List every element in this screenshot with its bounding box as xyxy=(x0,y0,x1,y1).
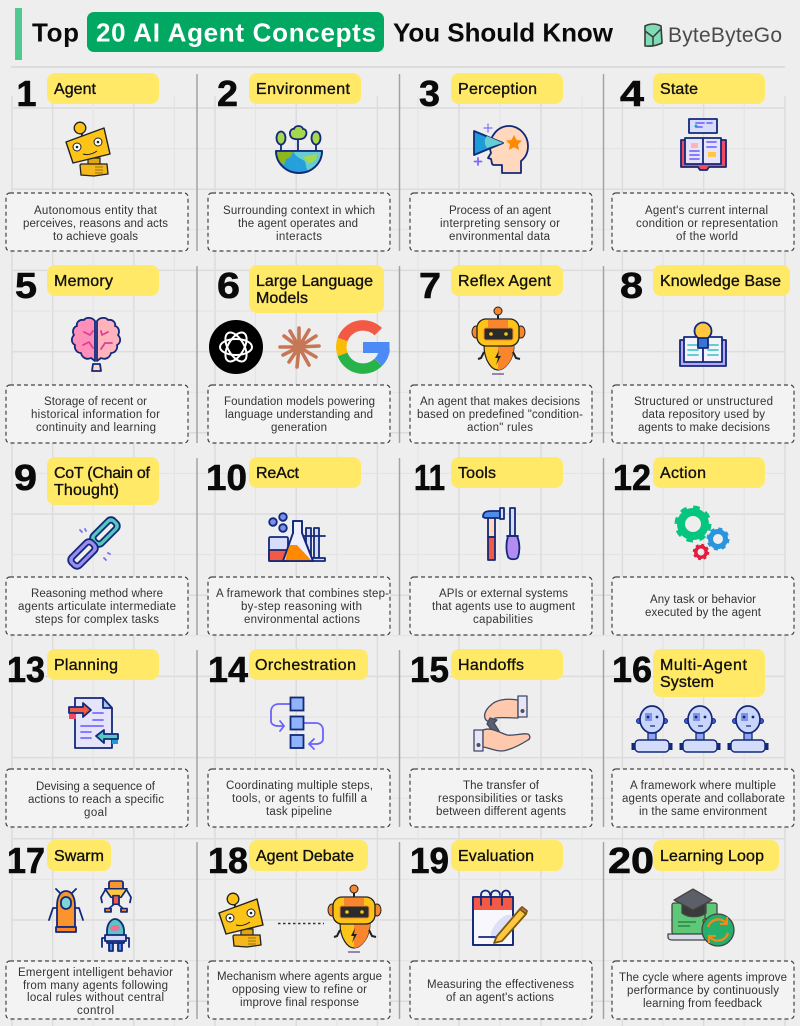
number 18: 18 xyxy=(208,840,248,881)
description: the agent operates and xyxy=(238,218,358,230)
heading: Learning Loop xyxy=(653,840,779,871)
description: action" rules xyxy=(467,422,533,434)
description xyxy=(612,193,794,251)
panel: 9 CoT (Chain of Thought) xyxy=(6,457,188,635)
panel: 18 Agent Debate xyxy=(208,840,390,1019)
description xyxy=(612,577,794,635)
heading: Swarm: Swarm xyxy=(54,848,104,865)
icon: open book with speech bubble xyxy=(681,119,726,170)
description: improve final response xyxy=(240,997,359,1009)
description: control xyxy=(77,1005,114,1017)
number 20: 20 xyxy=(608,840,654,881)
icon: head with vision cone xyxy=(474,124,528,173)
heading: Orchestration: Orchestration xyxy=(255,657,356,674)
heading: Orchestration xyxy=(249,649,368,680)
description: actions to reach a specific xyxy=(28,794,164,806)
icon: earth with trees xyxy=(276,126,322,173)
heading: State: State xyxy=(660,81,698,98)
title: 20 AI Agent Concepts xyxy=(96,18,376,48)
panel: 8 Knowledge Base xyxy=(612,265,794,443)
heading: Learning Loop: Learning Loop xyxy=(660,848,764,865)
description: opposing view to refine or xyxy=(232,984,367,996)
panel: 1 Agent xyxy=(6,73,188,251)
description xyxy=(612,385,794,443)
panel: 4 State xyxy=(612,73,794,251)
number 11: 11 xyxy=(414,457,445,498)
heading: Multi-Agent System xyxy=(653,649,765,697)
description xyxy=(208,193,390,251)
description xyxy=(208,769,390,827)
description: perceives, reasons and acts xyxy=(23,218,168,230)
icon: brain xyxy=(72,318,120,371)
description: agents operate and collaborate xyxy=(622,793,785,805)
description: that agents use to augment xyxy=(432,601,576,613)
description: Any task or behavior xyxy=(650,594,756,606)
number 8: 8 xyxy=(620,265,643,306)
description: environmental actions xyxy=(244,614,360,626)
panel: 12 Action xyxy=(612,457,794,635)
icon: hammer and screwdriver xyxy=(483,508,519,560)
panel: 20 Learning Loop xyxy=(608,840,794,1019)
number 7: 7 xyxy=(419,265,441,306)
panel: 16 Multi-Agent System xyxy=(612,649,794,827)
description: An agent that makes decisions xyxy=(420,396,580,408)
number 19: 19 xyxy=(410,840,449,881)
heading: Evaluation xyxy=(451,840,563,871)
description: language understanding and xyxy=(225,409,373,421)
description: tools, or agents to fulfill a xyxy=(232,793,368,805)
number 9: 9 xyxy=(14,457,37,498)
description xyxy=(410,385,592,443)
number 14: 14 xyxy=(208,649,248,690)
description: Agent's current internal xyxy=(645,205,768,217)
heading: Knowledge Base xyxy=(653,265,790,296)
description: Reasoning method where xyxy=(31,588,163,600)
heading: Perception xyxy=(451,73,563,104)
heading: Planning: Planning xyxy=(54,657,118,674)
panel: 19 Evaluation xyxy=(410,840,592,1019)
description: agents to make decisions xyxy=(638,422,770,434)
panel: 15 Handoffs xyxy=(410,649,592,827)
description xyxy=(6,961,188,1019)
description: agents articulate intermediate xyxy=(18,601,176,613)
heading: CoT (Chain of Thought): CoT (Chain of xyxy=(54,465,151,482)
description: continuity and learning xyxy=(36,422,156,434)
header accent bar xyxy=(15,8,22,60)
description: historical information for xyxy=(31,409,160,421)
description: Devising a sequence of xyxy=(36,781,156,793)
description: APIs or external systems xyxy=(439,588,568,600)
icon: laptop, graduation cap, refresh xyxy=(668,889,734,946)
description: Structured or unstructured xyxy=(634,396,773,408)
heading: Multi-Agent System: Multi-Agent xyxy=(660,657,748,674)
number 6: 6 xyxy=(217,265,240,306)
heading: Swarm xyxy=(47,840,111,871)
panel: 10 ReAct xyxy=(206,457,390,635)
description: Process of an agent xyxy=(449,205,552,217)
icon: reflex robot xyxy=(472,307,525,374)
logo: ByteByteGo: ByteByteGo xyxy=(668,24,782,47)
description: Mechanism where agents argue xyxy=(217,971,382,983)
number 4: 4 xyxy=(620,73,644,114)
description: Foundation models powering xyxy=(224,396,375,408)
panel: 17 Swarm xyxy=(6,840,188,1019)
description: steps for complex tasks xyxy=(35,614,159,626)
heading: Agent xyxy=(47,73,159,104)
panel: 13 Planning xyxy=(6,649,188,827)
description: data repository used by xyxy=(642,409,765,421)
description: generation xyxy=(271,422,327,434)
heading: Memory xyxy=(47,265,159,296)
icon: OpenAI logo xyxy=(209,320,263,374)
panel: 14 Orchestration xyxy=(208,649,390,827)
description: interacts xyxy=(276,231,322,243)
icon: three robot busts xyxy=(633,706,767,752)
heading: Reflex Agent xyxy=(451,265,563,296)
number 3: 3 xyxy=(419,73,440,114)
heading: Large Language Models: Large Language xyxy=(256,273,373,290)
description: A framework that combines step- xyxy=(216,588,389,600)
panel: 11 Tools xyxy=(410,457,592,635)
heading: Action xyxy=(653,457,765,488)
icon: lab flasks xyxy=(269,513,325,561)
description xyxy=(410,577,592,635)
description: environmental data xyxy=(449,231,551,243)
heading: ReAct: ReAct xyxy=(256,465,300,482)
icon: Claude starburst xyxy=(280,328,319,367)
title xyxy=(32,12,614,52)
description xyxy=(6,769,188,827)
description: The cycle where agents improve xyxy=(619,972,787,984)
description xyxy=(6,385,188,443)
description: goal xyxy=(84,807,107,819)
description xyxy=(6,193,188,251)
heading: Tools xyxy=(451,457,563,488)
heading: Handoffs: Handoffs xyxy=(458,657,524,674)
description xyxy=(208,961,390,1019)
description xyxy=(410,961,592,1019)
number 13: 13 xyxy=(7,649,45,690)
description xyxy=(410,769,592,827)
description xyxy=(208,577,390,635)
heading: Large Language Models xyxy=(249,265,384,313)
icon: gears xyxy=(676,508,728,559)
description: interpreting sensory or xyxy=(440,218,560,230)
description xyxy=(612,769,794,827)
description: Coordinating multiple steps, xyxy=(226,780,373,792)
description: performance by continuously xyxy=(627,985,779,997)
title: You Should Know xyxy=(393,18,614,48)
heading: Knowledge Base: Knowledge Base xyxy=(660,273,781,290)
heading: Action: Action xyxy=(660,465,706,482)
heading: Handoffs xyxy=(451,649,563,680)
panel: 2 Environment xyxy=(208,73,390,251)
description: in the same environment xyxy=(639,806,768,818)
icon: workflow squares xyxy=(271,698,323,749)
heading: Tools: Tools xyxy=(458,465,496,482)
heading: CoT (Chain of Thought): Thought) xyxy=(54,482,119,499)
icon: Google G xyxy=(341,325,390,369)
description: from many agents following xyxy=(23,980,168,992)
description: The transfer of xyxy=(463,780,540,792)
heading: Agent Debate: Agent Debate xyxy=(256,848,354,865)
description: based on predefined "condition- xyxy=(417,409,583,421)
icon: notepad and pencil xyxy=(473,890,527,945)
heading: Evaluation: Evaluation xyxy=(458,848,534,865)
panel: 7 Reflex Agent xyxy=(410,265,592,443)
number 5: 5 xyxy=(15,265,37,306)
description: of an agent's actions xyxy=(446,992,554,1004)
description: Storage of recent or xyxy=(44,396,147,408)
icon: tilted robot xyxy=(66,122,110,176)
number 16: 16 xyxy=(612,649,652,690)
number 12: 12 xyxy=(613,457,651,498)
description: capabilities xyxy=(473,614,533,626)
description: of the world xyxy=(676,231,738,243)
description: condition or representation xyxy=(636,218,778,230)
description: between different agents xyxy=(436,806,566,818)
icon: chain link xyxy=(66,515,122,571)
description: task pipeline xyxy=(266,806,332,818)
number 17: 17 xyxy=(7,840,45,881)
description xyxy=(410,193,592,251)
heading: Planning xyxy=(47,649,159,680)
heading: Environment xyxy=(249,73,361,104)
heading: ReAct xyxy=(249,457,361,488)
heading: State xyxy=(653,73,765,104)
heading: Reflex Agent: Reflex Agent xyxy=(458,273,552,290)
icon: two debating robots xyxy=(219,885,381,952)
title: Top xyxy=(32,18,79,48)
icon: swarm of three robots xyxy=(49,881,131,951)
heading: Agent Debate xyxy=(249,840,368,871)
icon: hands passing keys xyxy=(474,696,530,751)
description xyxy=(6,577,188,635)
description xyxy=(612,961,794,1019)
description: learning from feedback xyxy=(643,998,762,1010)
description: Surrounding context in which xyxy=(223,205,375,217)
description: A framework where multiple xyxy=(630,780,776,792)
heading: Perception: Perception xyxy=(458,81,537,98)
number 2: 2 xyxy=(217,73,238,114)
panel: 3 Perception xyxy=(410,73,592,251)
heading: CoT (Chain of Thought) xyxy=(47,457,159,505)
icon: document with arrows xyxy=(69,698,118,748)
number 1: 1 xyxy=(16,73,37,114)
heading: Agent: Agent xyxy=(54,81,97,98)
description: to achieve goals xyxy=(53,231,138,243)
description: by-step reasoning with xyxy=(241,601,362,613)
description: local rules without central xyxy=(27,992,164,1004)
heading: Large Language Models: Models xyxy=(256,290,308,307)
description: executed by the agent xyxy=(645,607,762,619)
heading: Environment: Environment xyxy=(256,81,351,98)
number 10: 10 xyxy=(206,457,247,498)
description: Emergent intelligent behavior xyxy=(18,967,173,979)
description: Autonomous entity that xyxy=(34,205,158,217)
panel: 5 Memory xyxy=(6,265,188,443)
heading: Multi-Agent System: System xyxy=(660,674,714,691)
description: responsibilities or tasks xyxy=(438,793,563,805)
description xyxy=(208,385,390,443)
number 15: 15 xyxy=(410,649,449,690)
icon: book with light bulb xyxy=(680,322,726,366)
heading: Memory: Memory xyxy=(54,273,113,290)
panel: 6 Large Language Models xyxy=(208,265,390,443)
description: Measuring the effectiveness xyxy=(427,979,574,991)
